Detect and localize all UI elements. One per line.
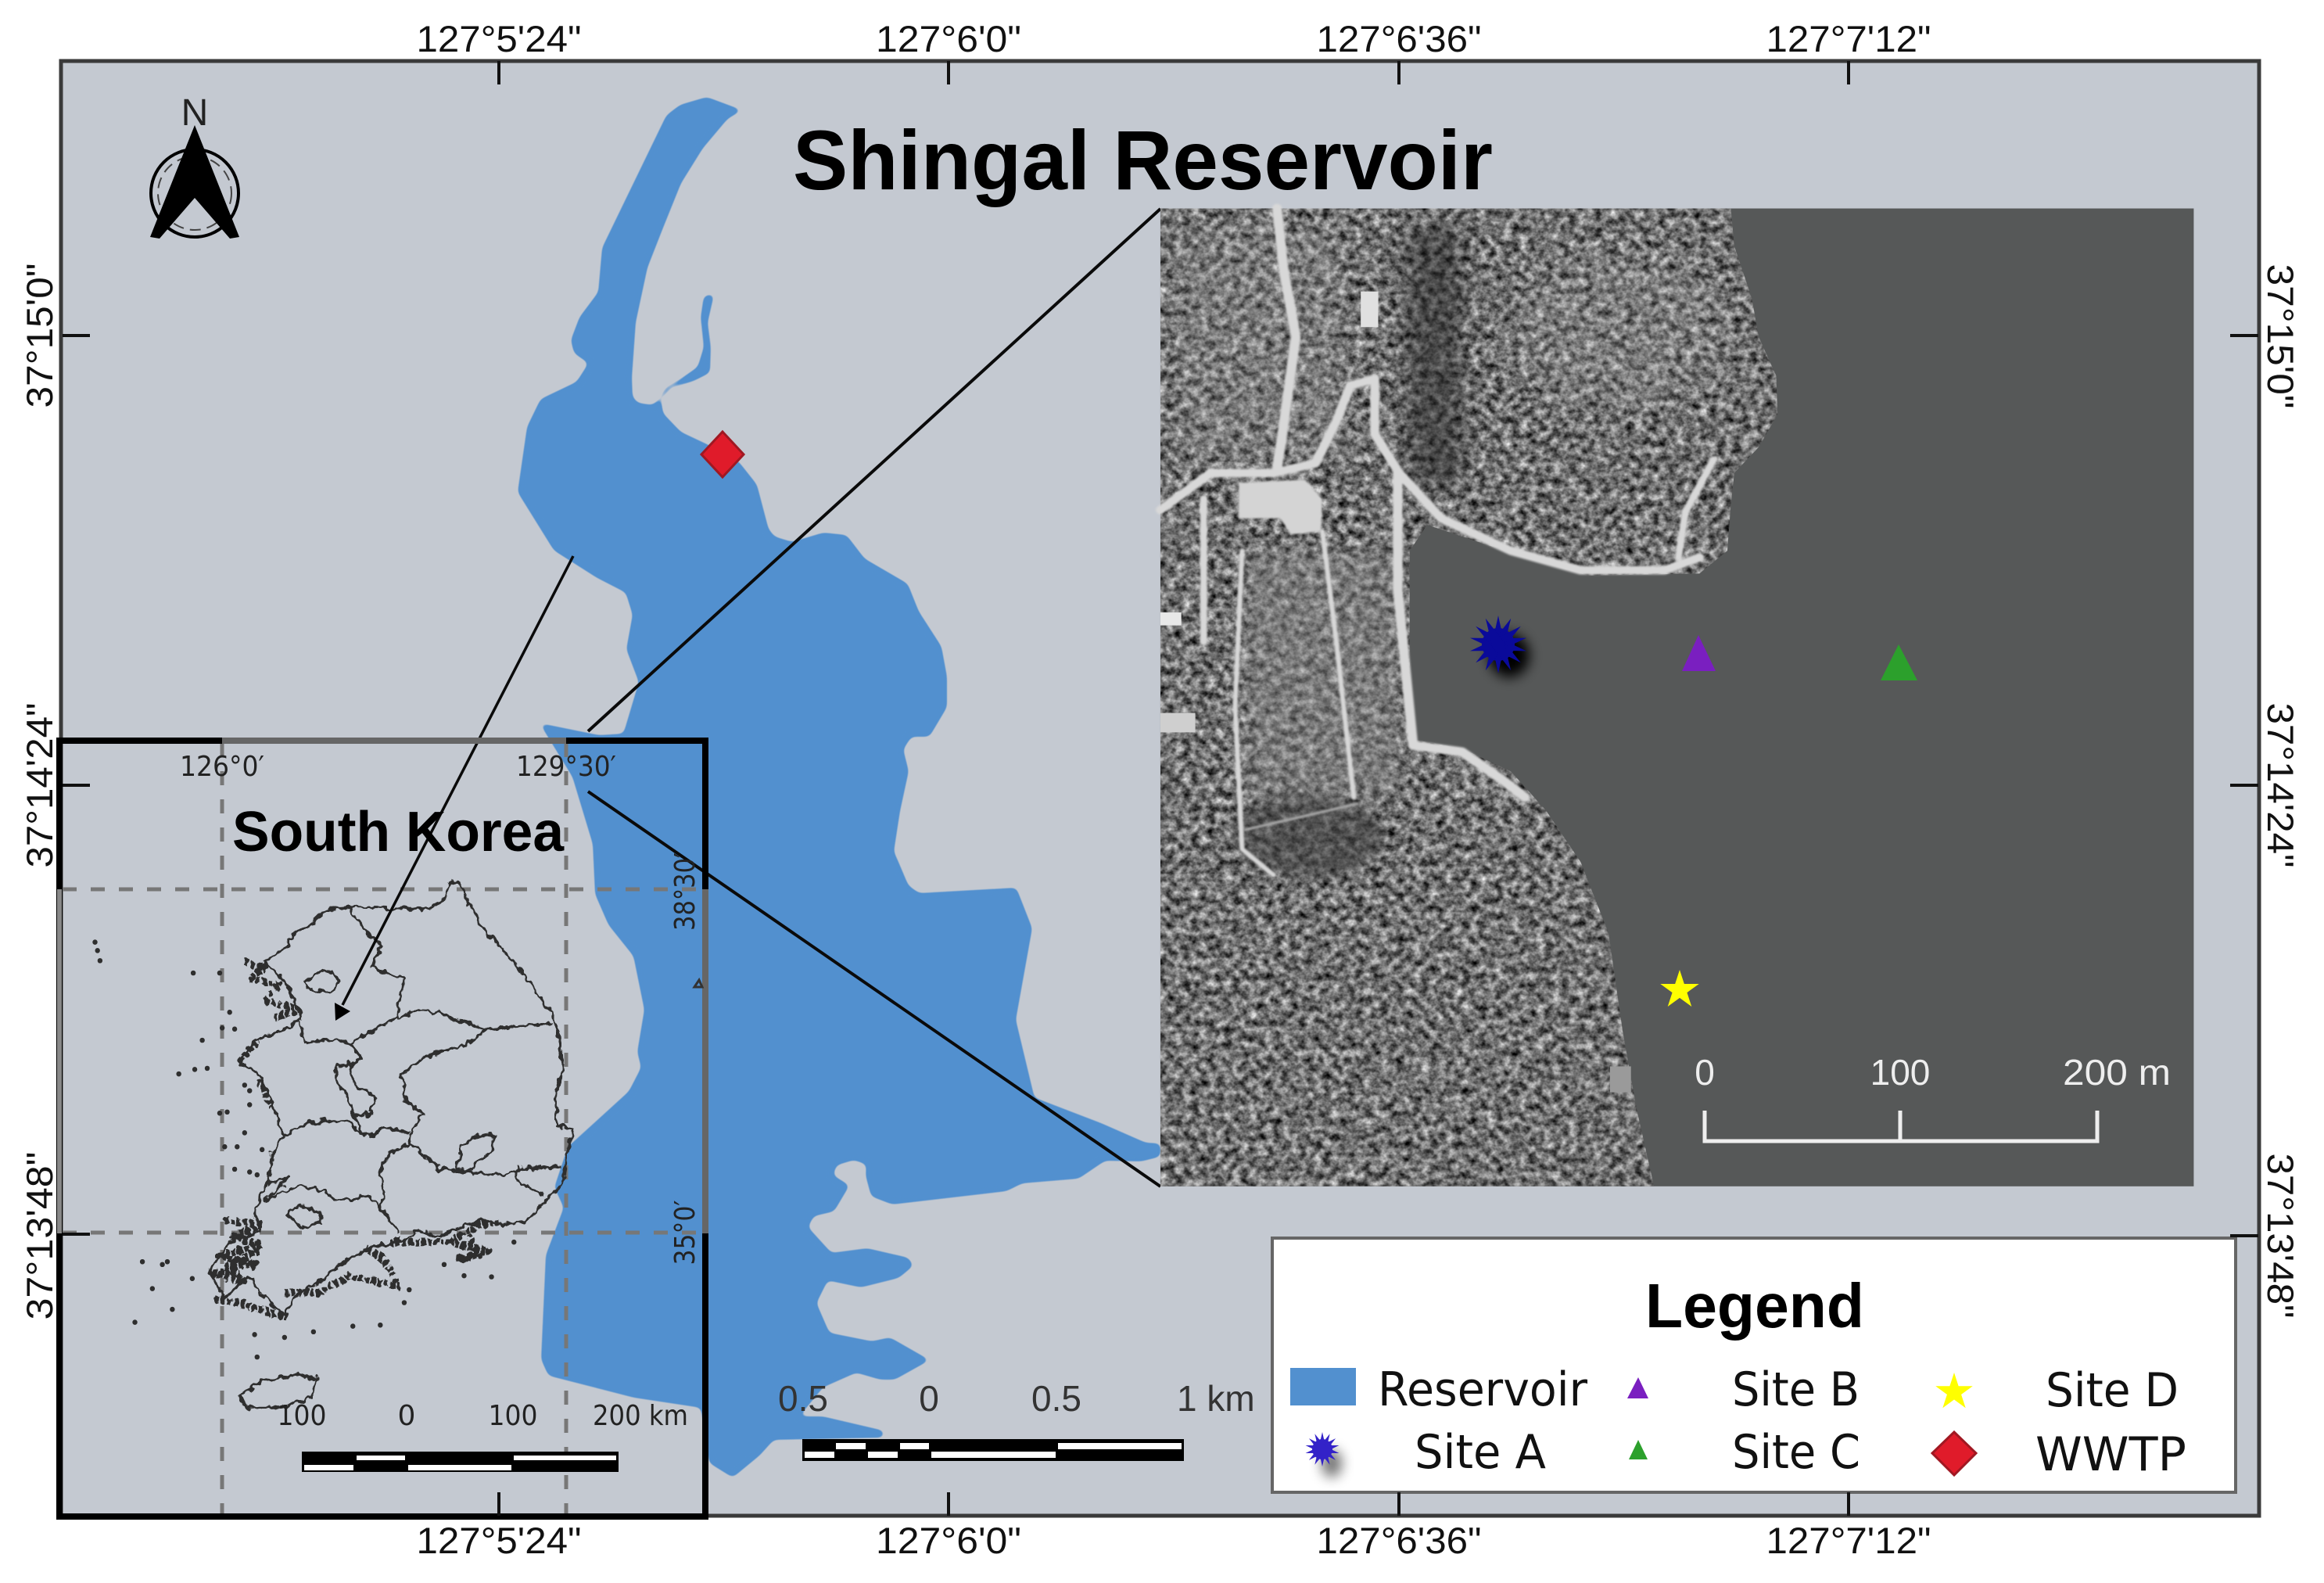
right axis labels: 37°14'24" xyxy=(2260,702,2301,868)
bottom axis labels: 127°7'12" xyxy=(1766,1520,1931,1561)
zoom connector lines to satellite image xyxy=(588,209,1160,1186)
left axis labels: 37°14'24" xyxy=(19,702,60,868)
Ulleungdo islet xyxy=(694,980,702,987)
inset scale bar: 100 xyxy=(277,1400,327,1432)
marker: WWTP on map xyxy=(701,432,744,477)
left axis labels xyxy=(19,263,60,1320)
island clusters xyxy=(214,962,499,1318)
satellite image panel xyxy=(1160,209,2193,1186)
bottom axis labels: 127°6'36" xyxy=(1317,1520,1481,1561)
legend item: reservoir xyxy=(1290,1362,1587,1417)
marker: site C on satellite xyxy=(1881,644,1917,680)
inset longitude label 129: 129°30′ xyxy=(516,751,616,783)
legend item: site C: Site C xyxy=(1732,1425,1860,1480)
inset frame xyxy=(59,741,705,1517)
inset grid lines xyxy=(63,743,702,1513)
inset: South Korea locator xyxy=(59,556,705,1517)
inset latitude label 38: 38°30′ xyxy=(669,853,701,931)
top axis labels: 127°7'12" xyxy=(1766,18,1931,59)
top axis labels: 127°6'36" xyxy=(1317,18,1481,59)
right axis labels: 37°13'48" xyxy=(2260,1153,2301,1319)
main scale bar: 0 xyxy=(919,1378,939,1419)
marker: site D on satellite xyxy=(1660,970,1699,1007)
marker: site B on satellite xyxy=(1682,635,1716,671)
satellite scale bar: 100 xyxy=(1870,1052,1930,1093)
inset scale bar xyxy=(277,1400,688,1472)
legend item: site B xyxy=(1627,1362,1860,1417)
inset scale bar: 0 xyxy=(398,1400,415,1432)
left axis labels: 37°15'0" xyxy=(19,263,60,408)
South Korea outline map xyxy=(95,881,573,1408)
inset longitude label 126: 126°0′ xyxy=(180,751,264,783)
right axis labels xyxy=(2260,264,2301,1319)
reservoir polygon xyxy=(518,98,1160,1477)
north arrow: N xyxy=(181,92,208,134)
main scale bar xyxy=(778,1378,1255,1461)
top axis labels: 127°5'24" xyxy=(416,18,582,59)
right axis labels: 37°15'0" xyxy=(2260,264,2301,408)
satellite scale bar xyxy=(1695,1052,2171,1141)
marker: site A on satellite xyxy=(1469,616,1530,677)
legend item: WWTP: WWTP xyxy=(2035,1427,2186,1482)
main scale bar: 0.5 xyxy=(1031,1378,1081,1419)
main scale bar: 1 km xyxy=(1177,1378,1255,1419)
inset scale bar: 200 km xyxy=(593,1400,688,1432)
satellite scale bar: 0 xyxy=(1695,1052,1715,1093)
north arrow xyxy=(150,92,239,239)
legend item: site D: Site D xyxy=(2046,1363,2179,1418)
legend item: site D xyxy=(1935,1363,2179,1418)
inset latitude label 35: 35°0′ xyxy=(669,1200,701,1265)
top axis labels: 127°6'0" xyxy=(876,18,1021,59)
legend item: site B: Site B xyxy=(1732,1362,1860,1417)
bottom axis labels xyxy=(416,1520,1931,1561)
title: Shingal Reservoir xyxy=(793,113,1493,207)
legend item: reservoir: Reservoir xyxy=(1378,1362,1587,1417)
main scale bar: 0.5 xyxy=(778,1378,828,1419)
scattered islets xyxy=(95,942,515,1357)
legend item: site A xyxy=(1304,1425,1546,1480)
legend xyxy=(1272,1238,2236,1492)
satellite scale bar: 200 m xyxy=(2063,1052,2171,1093)
inset heading: South Korea xyxy=(232,801,565,863)
inset scale bar: 100 xyxy=(488,1400,538,1432)
legend title: Legend xyxy=(1645,1271,1864,1341)
roads and dam xyxy=(1160,209,1713,875)
legend item: site A: Site A xyxy=(1415,1425,1546,1480)
legend item: WWTP xyxy=(1932,1427,2186,1482)
land texture xyxy=(1160,209,1789,1186)
bottom axis labels: 127°6'0" xyxy=(876,1520,1021,1561)
left axis labels: 37°13'48" xyxy=(19,1151,60,1320)
legend item: site C xyxy=(1629,1425,1860,1480)
top axis labels xyxy=(416,18,1931,59)
arrow to reservoir location xyxy=(335,556,573,1021)
bottom axis labels: 127°5'24" xyxy=(416,1520,582,1561)
